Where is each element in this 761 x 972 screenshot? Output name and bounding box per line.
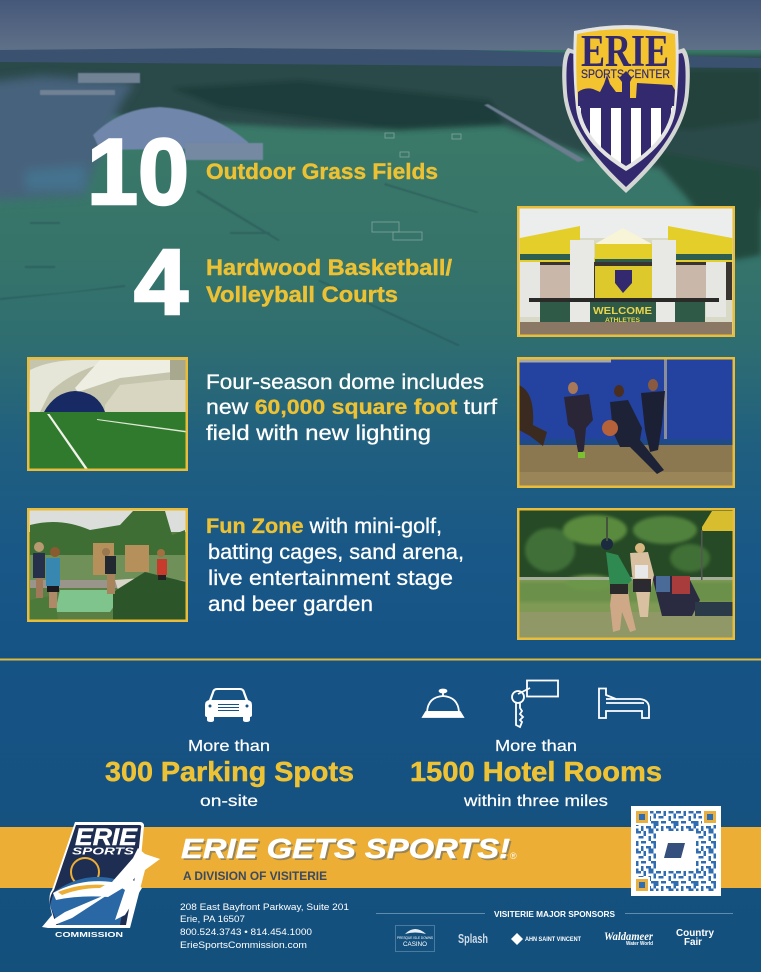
wordmark ERIE: ERIE xyxy=(75,824,138,851)
skyline xyxy=(578,71,675,106)
logo: Erie Sports Commission xyxy=(42,822,160,939)
text: four-season dome: field with new lighting xyxy=(206,422,431,445)
stat: hotel rooms: 1500 Hotel Rooms xyxy=(410,756,662,787)
sponsor: Waldameer Water World: Waldameer xyxy=(604,929,653,943)
icon: car xyxy=(205,688,252,722)
wordmark SPORTS: SPORTS xyxy=(72,846,134,858)
tagline: Erie Gets Sports: ERIE GETS SPORTS! xyxy=(183,835,512,866)
stat: 4 hardwood courts: 4 xyxy=(134,230,188,334)
photo: welcome reception desk xyxy=(517,206,735,337)
shield stripes xyxy=(578,106,674,168)
text: four-season dome xyxy=(206,371,497,445)
sponsor: AHN Saint Vincent xyxy=(511,933,581,945)
stat: 4 hardwood courts xyxy=(134,230,452,334)
tagline: Erie Gets Sports: ® xyxy=(510,851,517,861)
stat: parking spots: on-site xyxy=(200,793,258,810)
text: four-season dome: Four-season dome includes xyxy=(206,371,484,394)
wordmark COMMISSION: COMMISSION xyxy=(55,930,123,939)
text: fun zone: batting cages, sand arena, xyxy=(208,541,464,564)
sponsor: Country Fair: Country xyxy=(676,927,714,939)
shield wordmark: ERIE xyxy=(581,26,669,76)
stat: 10 outdoor fields: Outdoor Grass Fields xyxy=(206,159,438,184)
sponsor: Waldameer Water World: Water World xyxy=(626,941,653,947)
road xyxy=(484,104,585,162)
address block: 208 East Bayfront Parkway, Suite 201 xyxy=(180,902,349,913)
sponsors heading: VISITERIE MAJOR SPONSORS xyxy=(494,910,616,919)
photo: welcome reception desk: ATHLETES xyxy=(605,318,640,324)
stat: parking spots xyxy=(105,738,354,810)
icon: bed xyxy=(599,688,649,718)
tagline: Erie Gets Sports: ERIE GETS SPORTS! xyxy=(181,833,510,864)
footer gold band xyxy=(0,827,761,888)
stat: hotel rooms xyxy=(410,738,662,810)
stat: 4 hardwood courts: Hardwood Basketball/ xyxy=(206,255,452,280)
shield subtitle: SPORTS CENTER xyxy=(581,67,670,81)
sponsor: AHN Saint Vincent: AHN SAINT VINCENT xyxy=(525,936,581,943)
stat: hotel rooms: More than xyxy=(495,738,577,755)
address block: Erie, PA 16507 xyxy=(180,914,245,925)
stat: 10 outdoor fields: 10 xyxy=(87,119,189,224)
stat: hotel rooms: within three miles xyxy=(463,793,608,810)
sponsor: Splash: Splash xyxy=(458,931,488,946)
address block: ErieSportsCommission.com xyxy=(180,940,307,951)
icon: room key with tag xyxy=(512,680,558,727)
photo: fun zone mini-golf xyxy=(27,508,188,622)
text: fun zone: Fun Zone with mini-golf, xyxy=(206,515,442,538)
address block: 800.524.3743 • 814.454.1000 xyxy=(180,927,312,938)
text: division of VisitErie: A DIVISION OF VISITERIE xyxy=(183,871,327,883)
text: fun zone: and beer garden xyxy=(208,593,373,616)
text: fun zone xyxy=(206,515,464,616)
sponsor: Presque Isle Downs Casino: CASINO xyxy=(403,942,427,948)
welcome banner text: WELCOME xyxy=(593,306,652,317)
sponsor: Presque Isle Downs Casino xyxy=(396,926,434,952)
stat: parking spots: More than xyxy=(188,738,270,755)
text: four-season dome: new 60,000 square foot turf xyxy=(206,396,497,419)
sponsor: Country Fair xyxy=(676,927,714,948)
stat: 4 hardwood courts: Volleyball Courts xyxy=(206,282,398,307)
photo: outdoor lacrosse player xyxy=(517,508,735,640)
dome in aerial photo xyxy=(40,73,263,160)
divider line xyxy=(0,658,761,660)
address block xyxy=(180,902,349,951)
text: fun zone: live entertainment stage xyxy=(208,567,453,590)
stat: 10 outdoor fields xyxy=(87,119,438,224)
stat: parking spots: 300 Parking Spots xyxy=(105,756,354,787)
logo: Erie Sports Center shield xyxy=(562,25,690,193)
icon: service bell xyxy=(423,690,463,717)
sponsor: Presque Isle Downs Casino: PRESQUE ISLE DOWNS xyxy=(397,936,434,940)
QR code xyxy=(631,806,721,896)
photo: indoor basketball game xyxy=(517,357,735,488)
sponsor: Country Fair: Fair xyxy=(684,936,702,948)
photo: dome turf field xyxy=(27,357,188,471)
